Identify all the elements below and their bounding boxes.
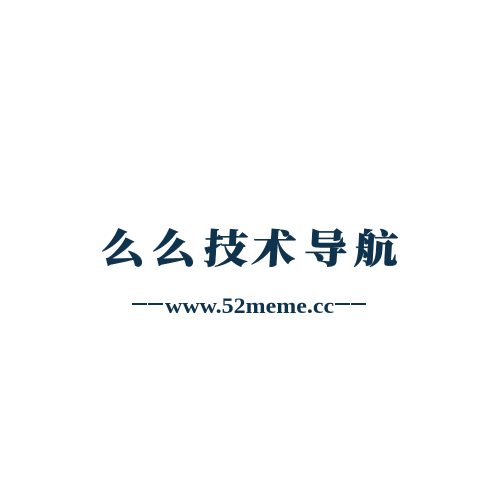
- title: 么么技术导航: [99, 218, 400, 275]
- right dashes: [335, 303, 366, 305]
- title: 么么技术导航: 术: [250, 218, 298, 275]
- website url: www.52meme.cc: [165, 293, 334, 318]
- title: 么么技术导航: 么: [99, 218, 147, 275]
- title: 么么技术导航: 导: [302, 218, 350, 275]
- title: 么么技术导航: 么: [150, 218, 198, 275]
- title: 么么技术导航: 航: [352, 218, 400, 275]
- title: 么么技术导航: 技: [202, 218, 250, 275]
- left dashes: [132, 303, 163, 305]
